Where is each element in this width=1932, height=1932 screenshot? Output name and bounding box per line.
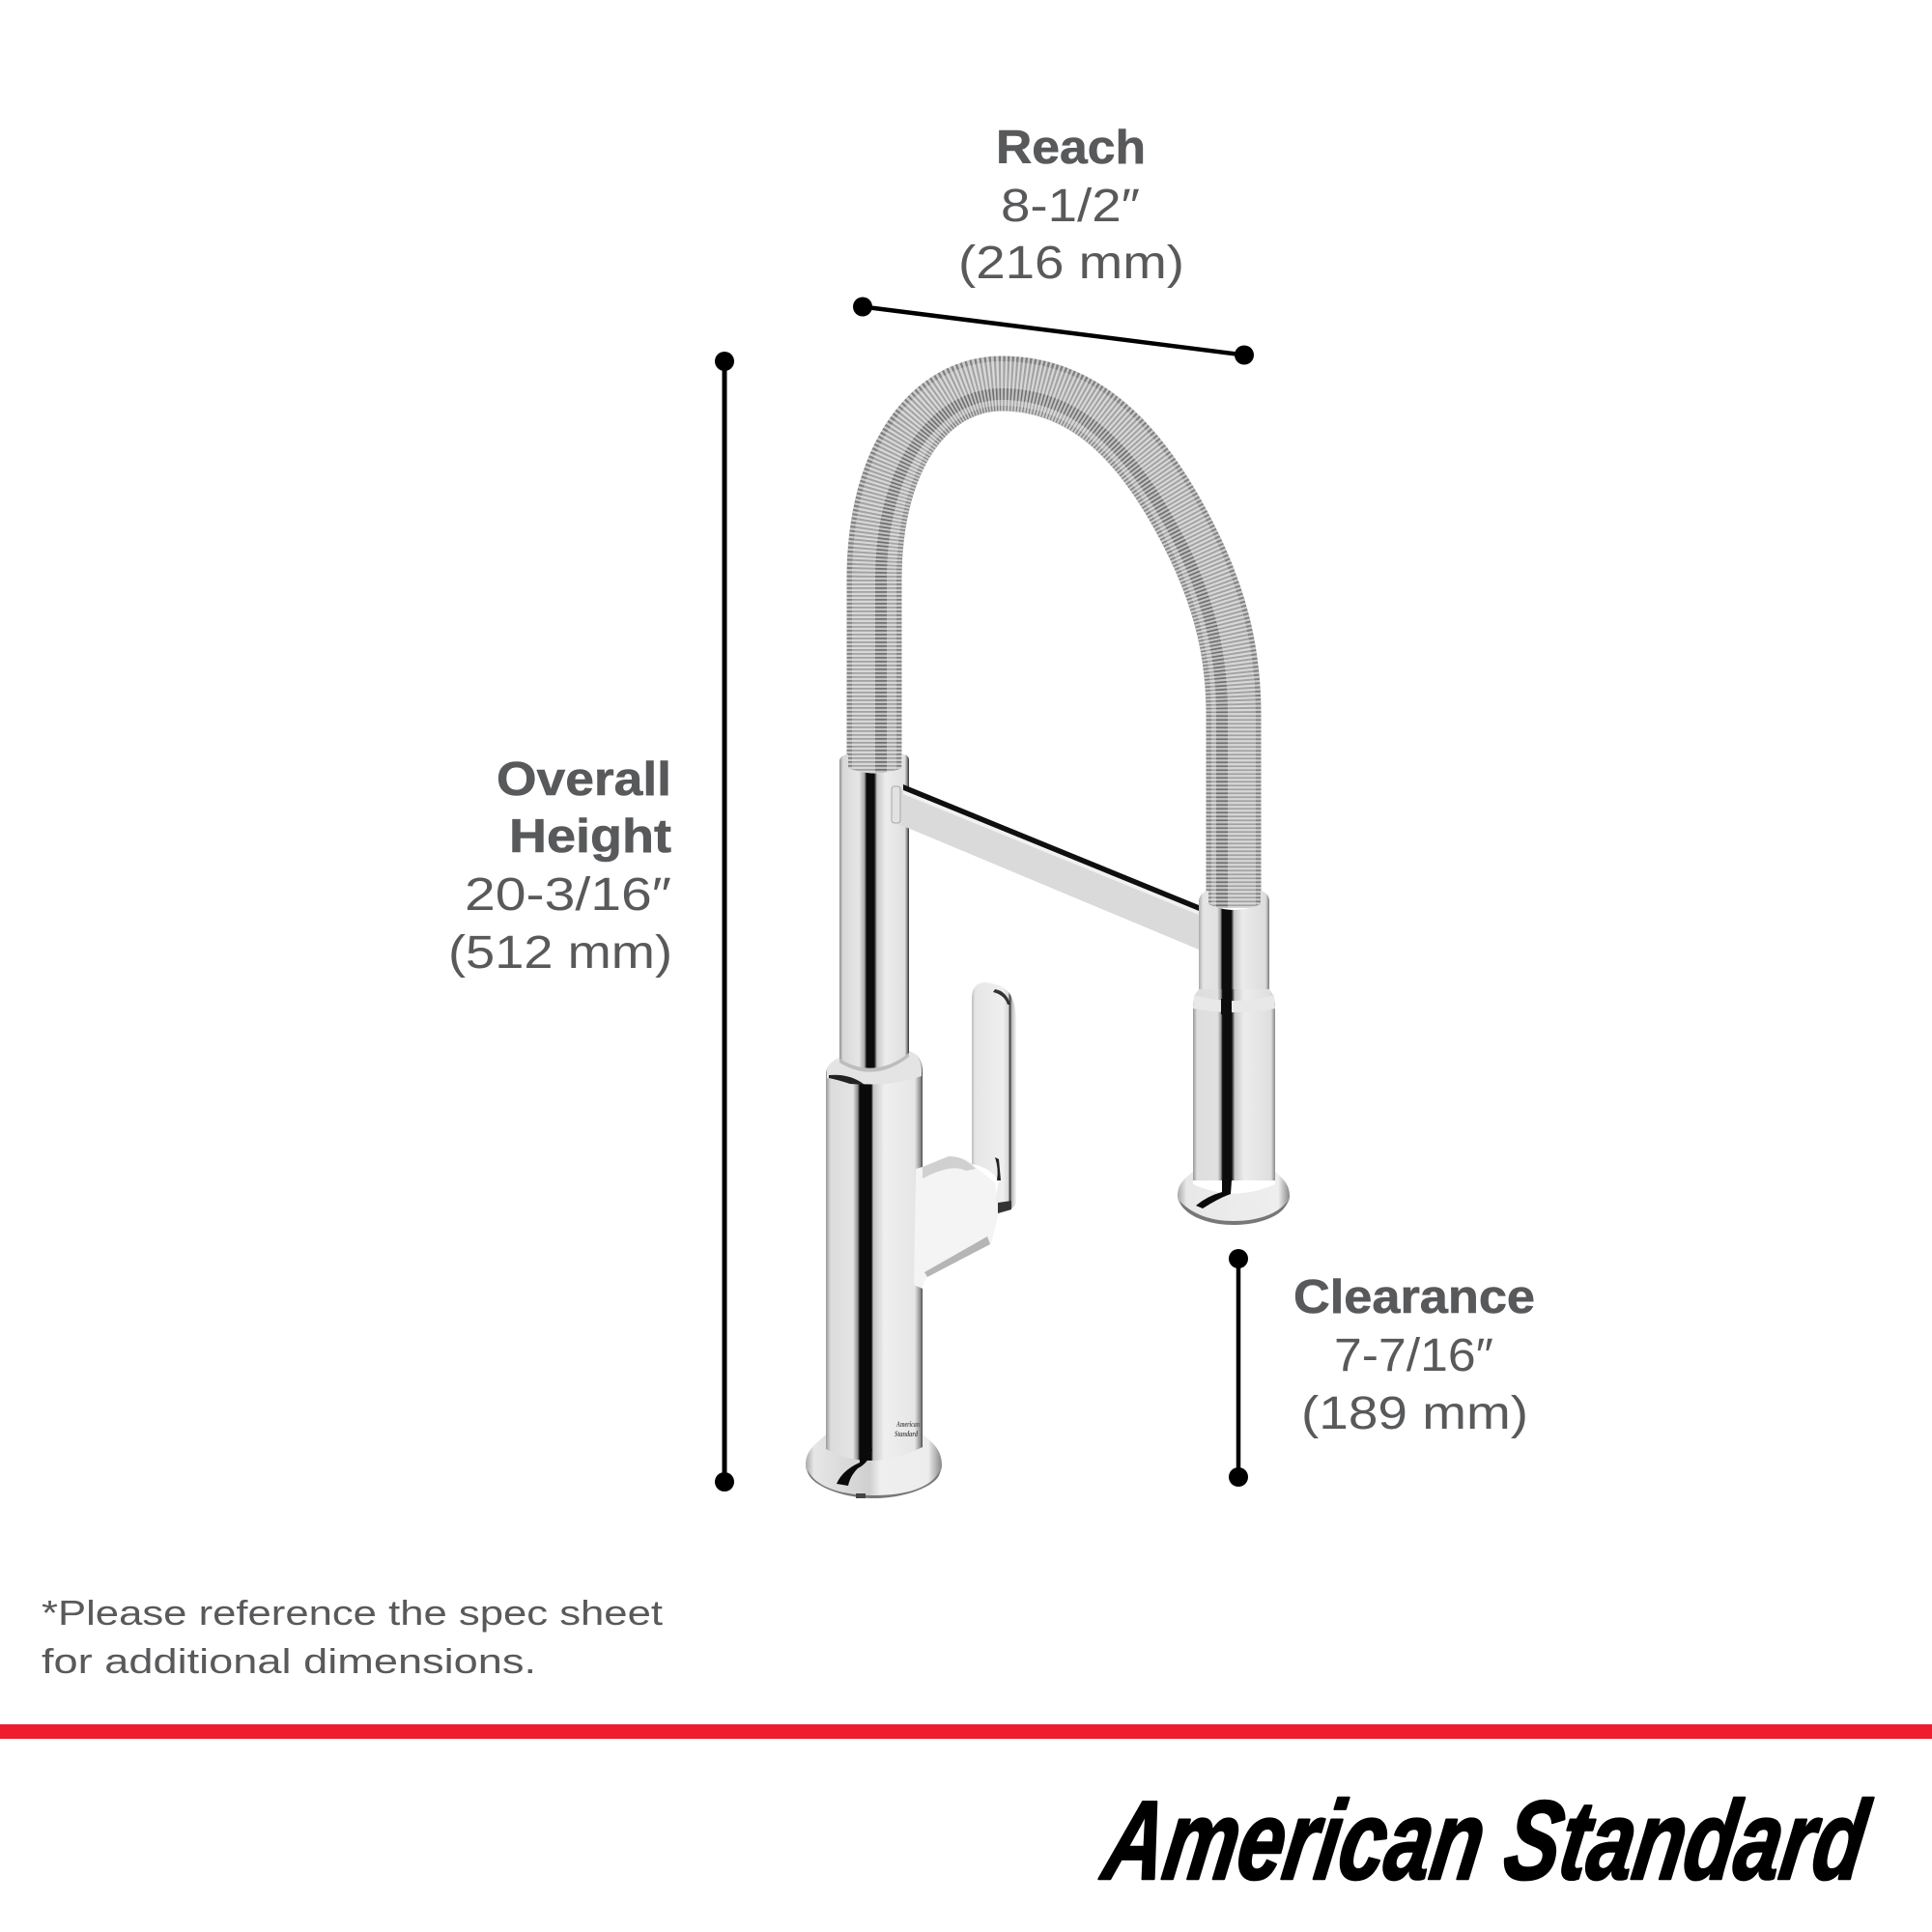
label: reach: 8-1/2″ — [1001, 181, 1140, 232]
label: clearance: Clearance — [1293, 1271, 1535, 1323]
footnote: *Please reference the spec sheet — [42, 1593, 663, 1633]
label: reach — [958, 122, 1184, 289]
head lower body — [1193, 989, 1275, 1180]
handle hub — [914, 1156, 999, 1289]
head flange dark accent — [1196, 1180, 1232, 1208]
label: overall height: Height — [509, 810, 671, 863]
head flange rim — [1179, 1201, 1288, 1225]
label: clearance: 7-7/16″ — [1334, 1330, 1493, 1381]
label: clearance — [1293, 1271, 1535, 1439]
footnote — [42, 1593, 663, 1681]
head dark band — [1221, 999, 1232, 1014]
faucet illustration — [806, 384, 1290, 1498]
dimension line: overall height — [715, 352, 734, 1492]
small logo on faucet body — [895, 1420, 920, 1438]
footnote: for additional dimensions. — [42, 1641, 536, 1681]
label: overall height — [448, 753, 672, 979]
label: overall height: 20-3/16″ — [465, 869, 671, 921]
spray head — [1178, 891, 1290, 1225]
dimension line: clearance — [1229, 1249, 1248, 1487]
head collar ridge — [1193, 995, 1275, 1012]
head collar — [1199, 891, 1269, 995]
crossbar — [892, 784, 1199, 950]
base flange — [806, 1435, 942, 1498]
head flange — [1178, 1172, 1290, 1225]
label: reach: Reach — [996, 122, 1146, 174]
lower body — [826, 1051, 923, 1447]
label: overall height: Overall — [497, 753, 671, 806]
red divider bar — [0, 1724, 1932, 1739]
label: clearance: (189 mm) — [1301, 1388, 1528, 1439]
dimension line: reach — [853, 298, 1254, 365]
label: overall height: (512 mm) — [448, 927, 672, 979]
coiled spring hose — [874, 384, 1234, 908]
small logo on faucet body: Standard — [895, 1430, 919, 1438]
lever handle — [972, 982, 1016, 1214]
small logo on faucet body: American — [895, 1420, 920, 1429]
upper column — [839, 754, 909, 1081]
label: reach: (216 mm) — [958, 238, 1184, 289]
